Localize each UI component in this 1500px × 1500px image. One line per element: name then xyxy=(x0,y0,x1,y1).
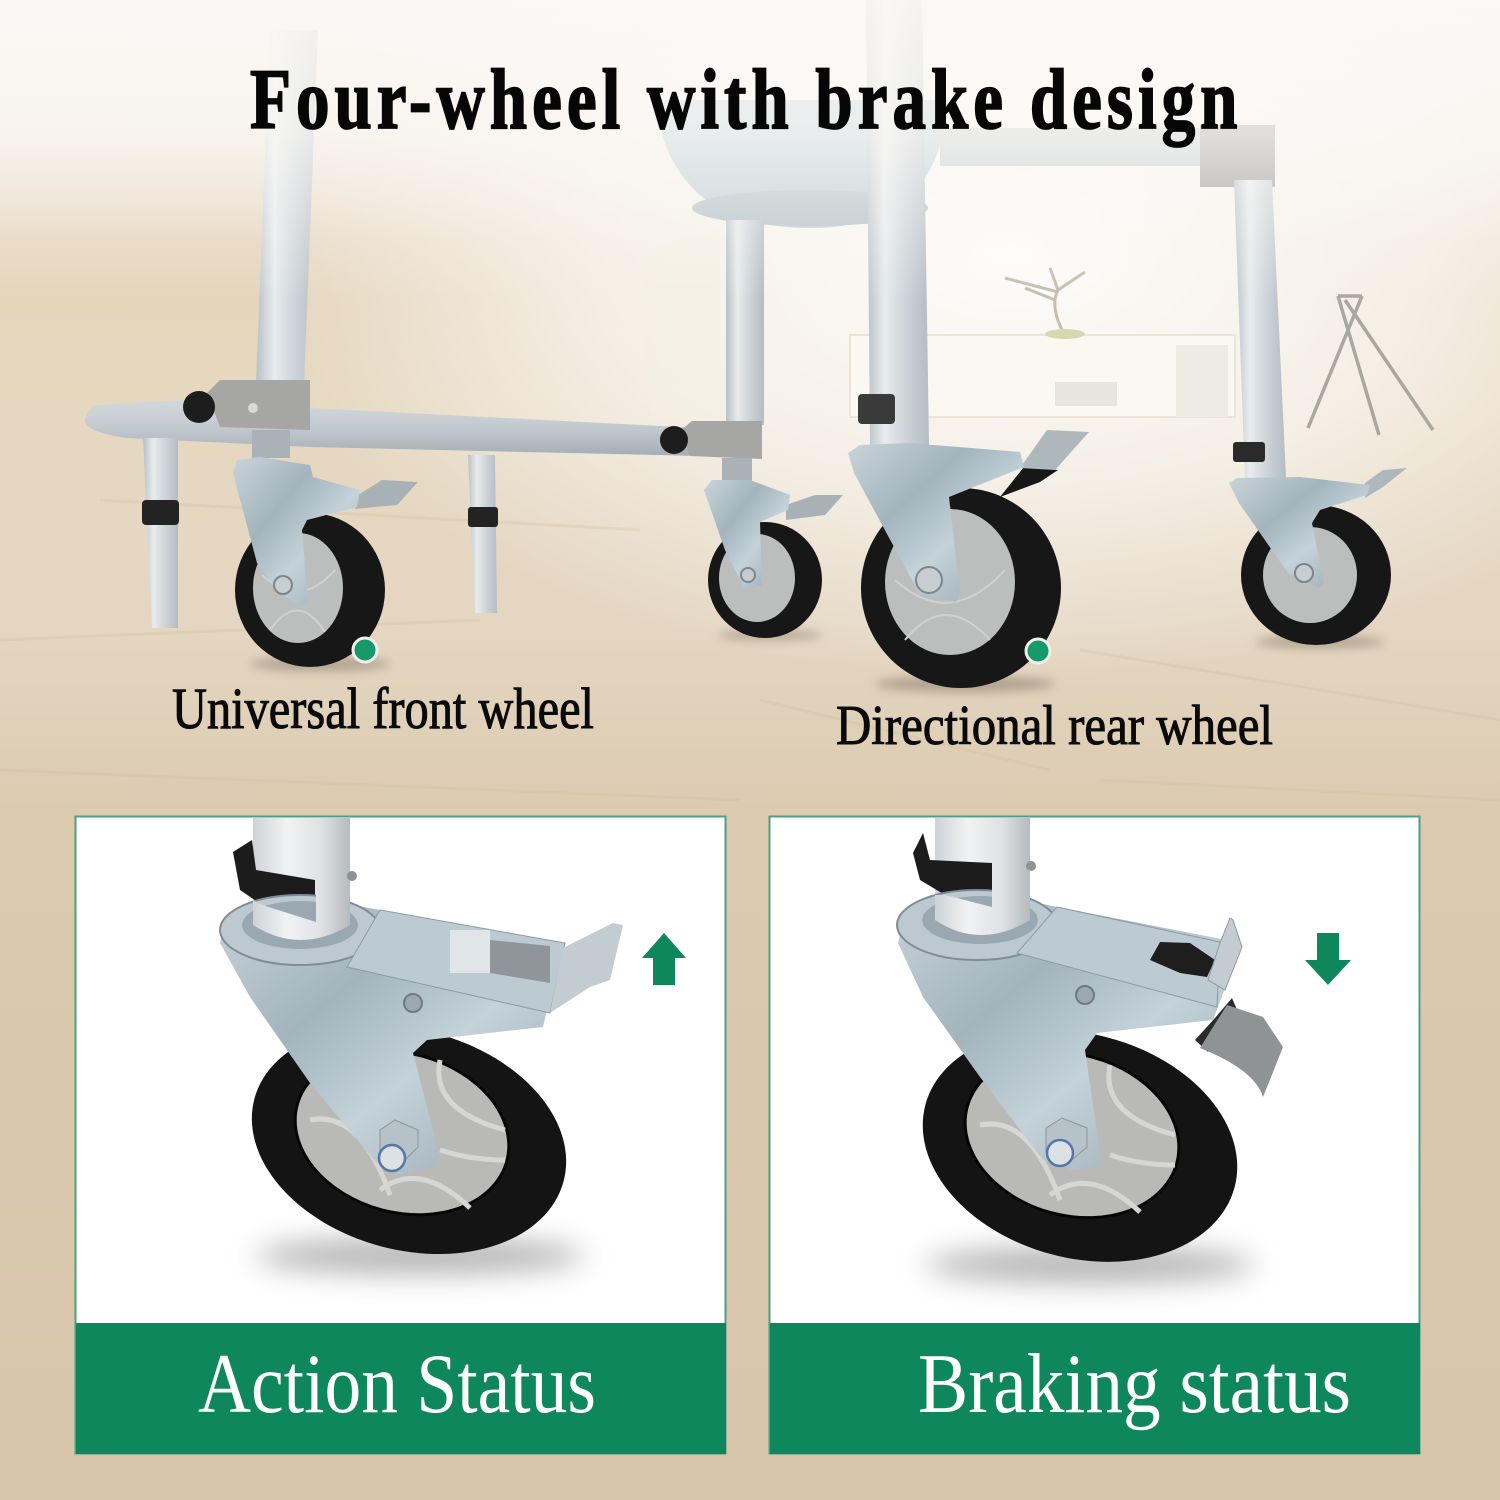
caster wheel xyxy=(896,996,1264,1296)
pedal hinge xyxy=(1195,998,1238,1052)
window xyxy=(640,230,720,420)
rear joint xyxy=(1200,125,1275,187)
knob left xyxy=(183,391,215,423)
brake pedal down xyxy=(1200,1005,1283,1097)
label: directional rear wheel: Directional rear wheel xyxy=(836,695,1273,757)
footrest collar right xyxy=(680,421,762,459)
chair frame xyxy=(85,0,1286,628)
background room decor xyxy=(640,230,1433,435)
white cabinet xyxy=(850,335,1235,417)
caster: directional rear wheel xyxy=(848,430,1089,692)
front left pole xyxy=(256,30,318,385)
swivel collar xyxy=(897,863,1057,960)
caster plate xyxy=(898,890,1242,1170)
label: universal front wheel: Universal front wheel xyxy=(172,676,594,741)
green band xyxy=(76,1323,726,1454)
front left axle xyxy=(252,430,290,458)
caster: front right wheel xyxy=(704,480,843,640)
title: Four-wheel with brake design xyxy=(250,51,1242,147)
front right pole xyxy=(726,220,764,425)
icon: down arrow xyxy=(1305,933,1351,985)
caster plate xyxy=(220,895,563,1175)
brake top plate xyxy=(347,910,565,1013)
rear clips xyxy=(858,394,895,424)
panel: action status xyxy=(76,816,726,1454)
icon: green dot rear wheel xyxy=(1026,639,1050,663)
pole xyxy=(935,818,1030,938)
green band xyxy=(770,1323,1420,1454)
caster wheel xyxy=(226,992,592,1288)
footrest collar left xyxy=(207,380,310,430)
pole pin xyxy=(347,871,357,881)
brake clip xyxy=(913,833,992,907)
plate screw xyxy=(1076,986,1094,1004)
footrest leg left xyxy=(143,438,178,628)
swivel collar xyxy=(220,880,380,965)
white haze over top of photo xyxy=(0,0,1500,300)
front right axle xyxy=(722,458,752,482)
seat bowl xyxy=(655,100,948,228)
wheel bolt xyxy=(379,1120,418,1171)
pole pin xyxy=(1026,861,1036,871)
brake top plate xyxy=(1017,907,1220,1007)
knob right xyxy=(660,426,688,454)
band label: Braking status xyxy=(918,1337,1351,1431)
panel: braking status xyxy=(770,816,1420,1454)
icon: up arrow xyxy=(642,933,686,985)
footrest leg right xyxy=(468,455,497,613)
caster: universal front wheel xyxy=(233,457,418,671)
brake pedal up xyxy=(550,923,623,1013)
wheel shadow xyxy=(925,1247,1255,1283)
wheel shadow xyxy=(255,1238,585,1274)
wheel bolt xyxy=(1046,1118,1087,1166)
icon: green dot front wheel xyxy=(353,638,377,662)
rear right pole xyxy=(1234,180,1286,478)
seat crossbar xyxy=(940,128,1220,166)
bonsai xyxy=(1005,268,1085,330)
footrest bar xyxy=(85,398,700,456)
pole xyxy=(253,818,350,938)
caster: rear right wheel xyxy=(1229,468,1407,648)
tripod stand xyxy=(1308,296,1433,435)
plate screw xyxy=(404,994,422,1012)
brake clip xyxy=(233,840,315,922)
vertical brake tab xyxy=(1208,918,1242,990)
band label: Action Status xyxy=(198,1337,596,1431)
rear left pole xyxy=(866,0,929,445)
